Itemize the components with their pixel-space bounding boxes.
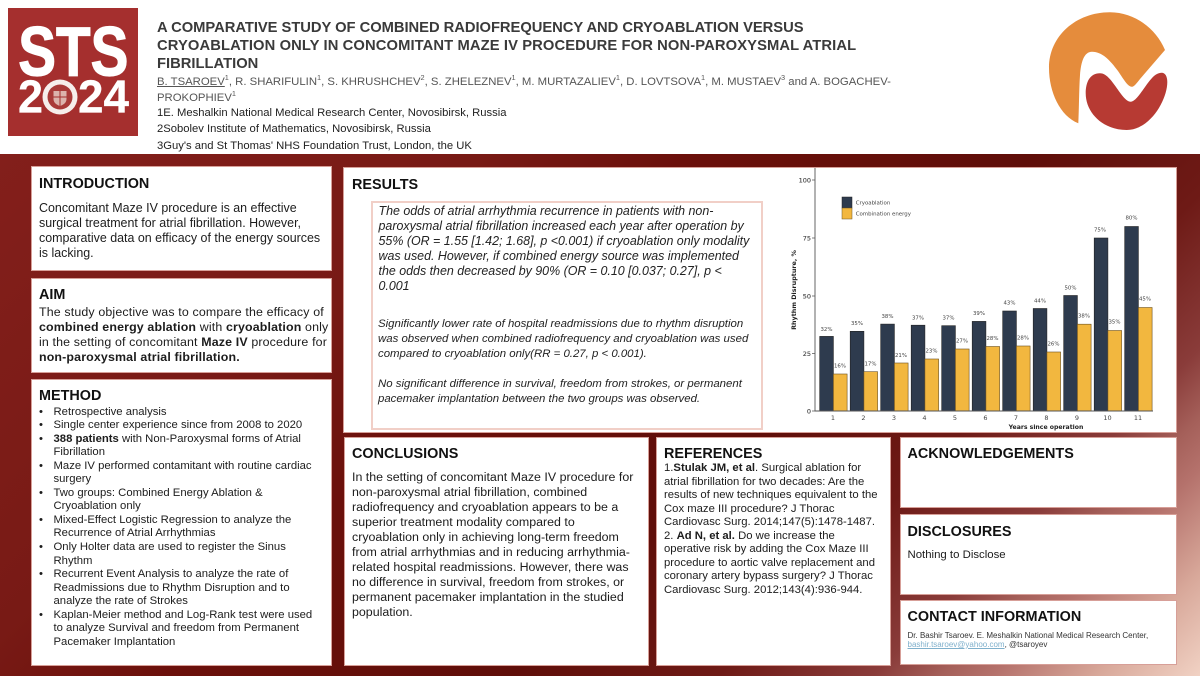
method list: Two groups: Combined Energy Ablation & [54, 487, 263, 499]
x axis tick labels: 11 [1134, 414, 1142, 422]
authors: B. TSAROEV1, R. SHARIFULIN1, S. KHRUSHCHEV2, S. ZHELEZNEV1, M. MURTAZALIEV1, D. LOVTSOVA1, M. MUSTAEV3 and A. BOGACHEV- [157, 73, 891, 88]
axes [815, 168, 1153, 411]
key finding text: paroxysmal atrial fibrillation increased each year after operation by [378, 218, 744, 232]
STS 2024 logo: 24 [78, 71, 129, 123]
introduction text: surgical treatment for atrial fibrillation. However, [39, 216, 301, 230]
y axis tick labels: 75 [803, 234, 811, 242]
method bullets: • [39, 487, 43, 499]
panel: contact information [900, 600, 1177, 665]
heading: introduction: INTRODUCTION [39, 176, 149, 192]
x axis tick labels [831, 414, 1142, 422]
references text: 1.Stulak JM, et al. Surgical ablation for [664, 462, 861, 474]
aim text: in the setting of concomitant Maze IV procedure for [39, 335, 327, 349]
no difference text [378, 378, 742, 405]
header band [0, 0, 1200, 154]
y axis tick labels [799, 176, 811, 416]
heading: method: METHOD [39, 388, 101, 404]
method list: Recurrence of Atrial Arrhythmias [54, 527, 215, 539]
bar value labels: 75% [1094, 228, 1106, 234]
x axis tick labels: 4 [922, 414, 927, 422]
conclusions text: radiofrequency and cryoablation appears to be a [352, 500, 618, 514]
references text: results of new techniques equivalent to the [664, 489, 878, 501]
method list: Recurrent Event Analysis to analyze the rate of [54, 568, 288, 580]
aim text: combined energy ablation with cryoablation only [39, 320, 328, 334]
heading: results: RESULTS [352, 177, 418, 193]
introduction text: Concomitant Maze IV procedure is an effective [39, 201, 297, 215]
references text: Cardiovasc Surg. 2014;147(5):1478-1487. [664, 516, 875, 528]
panel: conclusions [344, 437, 649, 666]
references text: Cox maze III procedure? J Thorac [664, 502, 835, 514]
x axis tick labels: 2 [861, 414, 866, 422]
conclusions text: population. [352, 605, 413, 619]
method list: Rhythm [54, 555, 92, 567]
title [157, 20, 856, 72]
conclusions text: related hospital readmissions. However, there was [352, 560, 629, 574]
key finding text [378, 204, 750, 292]
y axis title: Rhythm Disrupture, % [790, 249, 798, 330]
bar value labels: 37% [943, 316, 954, 322]
references text: operative risk by adding the Cox Maze III [664, 543, 869, 555]
x axis tick labels: 9 [1075, 414, 1079, 422]
panel: results [343, 167, 1177, 433]
title: CRYOABLATION ONLY IN CONCOMITANT MAZE IV PROCEDURE FOR NON-PAROXYSMAL ATRIAL [157, 38, 856, 54]
panel: disclosures [900, 514, 1177, 595]
method list: Only Holter data are used to register the Sinus [54, 541, 286, 553]
method bullets: • [39, 433, 43, 445]
panel: method [31, 379, 332, 666]
bar value labels: 45% [1139, 296, 1151, 302]
conclusions text: no difference in survival, freedom from strokes, or [352, 575, 624, 589]
introduction text: is lacking. [39, 246, 94, 260]
method list: Retrospective analysis [54, 406, 167, 418]
bar value labels: 26% [1048, 342, 1059, 348]
readmissions text: Significantly lower rate of hospital readmissions due to rhythm disruption [378, 318, 743, 330]
panel: acknowledgements [900, 437, 1177, 508]
method list: Mixed-Effect Logistic Regression to analyze the [54, 514, 291, 526]
x axis tick labels: 6 [983, 414, 988, 422]
conclusions text: cryoablation only in achieving long-term freedom [352, 530, 619, 544]
method list: Maze IV performed contamitant with routine cardiac [54, 460, 312, 472]
method bullets: • [39, 460, 43, 472]
bar value labels: 35% [851, 321, 863, 327]
heading: disclosures: DISCLOSURES [908, 524, 1011, 540]
aim text: non-paroxysmal atrial fibrillation. [39, 350, 240, 364]
y axis tick labels: 100 [799, 176, 811, 184]
method bullets: • [39, 514, 43, 526]
conclusions text: superior treatment modality compared to [352, 515, 575, 529]
y axis tick labels: 50 [803, 292, 811, 300]
aim text [39, 305, 328, 364]
y axis tick labels: 0 [807, 408, 811, 416]
heading: aim: AIM [39, 287, 65, 303]
STS 2024 logo [8, 8, 138, 136]
bar value labels [821, 216, 1151, 370]
legend [842, 197, 912, 219]
bar value labels: 16% [834, 364, 846, 370]
x axis tick labels: 8 [1044, 414, 1049, 422]
bar value labels: 32% [821, 327, 832, 333]
affiliations [157, 107, 507, 152]
x axis title: Years since operation [1008, 424, 1083, 431]
aim text: The study objective was to compare the efficacy of [39, 305, 324, 319]
legend: Combination energy [856, 212, 912, 218]
conclusions text: from atrial arrhythmias and in reducing arrhythmia- [352, 545, 630, 559]
bar value labels: 50% [1065, 286, 1076, 292]
y axis tick labels: 25 [803, 350, 811, 358]
references text: Cardiovasc Surg. 2012;143(4):936-944. [664, 584, 862, 596]
method bullets: • [39, 568, 43, 580]
contact details: Dr. Bashir Tsaroev. E. Meshalkin National Medical Research Center, [908, 630, 1148, 640]
method list: Single center experience since from 2008 to 2020 [54, 419, 302, 431]
method bullets: • [39, 609, 43, 621]
x axis tick labels: 5 [953, 414, 957, 422]
legend: Cryoablation [856, 200, 890, 206]
STS 2024 logo: 2 [18, 71, 43, 123]
panel: introduction [31, 166, 332, 271]
references text [664, 462, 878, 596]
bar value labels: 43% [1004, 300, 1015, 306]
heading: acknowledgements: ACKNOWLEDGEMENTS [908, 446, 1074, 462]
bar value labels: 39% [973, 311, 985, 317]
method bullets: • [39, 541, 43, 553]
contact details [908, 630, 1148, 649]
bar chart: rhythm disruption by year [790, 168, 1153, 431]
method list: Cryoablation only [54, 500, 141, 512]
heading: contact information: CONTACT INFORMATION [908, 609, 1081, 625]
method list: analyze the rate of Strokes [54, 595, 188, 607]
heading: references: REFERENCES [664, 446, 762, 462]
key finding text: was used. However, if combined energy source was implemented [378, 248, 739, 262]
readmissions text: compared to cryoablation only(RR = 0.27, p < 0.001). [378, 348, 647, 360]
bar value labels: 17% [865, 362, 876, 368]
method bullets: • [39, 406, 43, 418]
bar value labels: 21% [895, 353, 907, 359]
method list: Kaplan-Meier method and Log-Rank test were used [54, 609, 312, 621]
bar value labels: 37% [912, 316, 924, 322]
disclosures text: Nothing to Disclose [908, 549, 1006, 561]
no difference text: No significant difference in survival, freedom from strokes, or permanent [378, 378, 742, 390]
method list: surgery [54, 473, 91, 485]
method bullets [39, 406, 43, 621]
conclusions text: In the setting of concomitant Maze IV procedure for [352, 470, 633, 484]
panel: references [656, 437, 891, 666]
affiliations: 3Guy's and St Thomas' NHS Foundation Trust, London, the UK [157, 140, 472, 152]
title: A COMPARATIVE STUDY OF COMBINED RADIOFREQUENCY AND CRYOABLATION VERSUS [157, 20, 804, 36]
results callout box [371, 201, 763, 430]
introduction text: comparative data on efficacy of the energy sources [39, 231, 320, 245]
heading: conclusions: CONCLUSIONS [352, 446, 458, 462]
x axis tick labels: 7 [1014, 414, 1018, 422]
x axis tick labels: 10 [1103, 414, 1112, 422]
x axis tick labels: 3 [892, 414, 896, 422]
key finding text: 55% (OR = 1.55 [1.42; 1.68], p <0.001) if cryoablation only modality [378, 234, 749, 248]
no difference text: pacemaker implantation between the two groups was observed. [378, 393, 700, 405]
method list: Pacemaker Implantation [54, 636, 175, 648]
bar value labels: 80% [1126, 216, 1137, 222]
method bullets: • [39, 419, 43, 431]
references text: atrial fibrillation for two decades: Are the [664, 476, 864, 488]
contact details: bashir.tsaroev@yahoo.com, @tsaroyev [908, 640, 1047, 649]
chart bars [820, 226, 1152, 411]
key finding text: The odds of atrial arrhythmia recurrence in patients with non- [378, 204, 713, 218]
panel: aim [31, 278, 332, 373]
bar value labels: 38% [1078, 314, 1090, 320]
title: FIBRILLATION [157, 56, 258, 72]
x axis tick labels: 1 [831, 414, 835, 422]
authors [157, 73, 891, 104]
readmissions text: was observed when combined radiofrequency and cryoablation was used [378, 333, 748, 345]
references text: 2. Ad N, et al. Do we increase the [664, 530, 835, 542]
affiliations: 2Sobolev Institute of Mathematics, Novosibirsk, Russia [157, 123, 431, 135]
institution logo [1048, 12, 1168, 130]
method list: Fibrillation [54, 446, 105, 458]
key finding text: the odds then decreased by 90% (OR = 0.10 [0.037; 0.27], p < [378, 264, 722, 278]
bar value labels: 28% [987, 336, 998, 342]
maroon gradient background [0, 154, 1200, 676]
conclusions text [352, 470, 634, 619]
references text: coronary artery bypass surgery? J Thorac [664, 570, 873, 582]
introduction text [39, 201, 320, 260]
conclusions text: permanent pacemaker implantation in the studied [352, 590, 624, 604]
affiliations: 1E. Meshalkin National Medical Research Center, Novosibirsk, Russia [157, 107, 507, 119]
bar value labels: 35% [1109, 320, 1120, 326]
method list: 388 patients with Non-Paroxysmal forms of Atrial [54, 433, 301, 445]
conclusions text: non-paroxysmal atrial fibrillation, combined [352, 485, 587, 499]
bar value labels: 23% [926, 348, 937, 354]
bar value labels: 27% [956, 338, 968, 344]
key finding text: 0.001 [378, 278, 410, 292]
bar value labels: 38% [882, 314, 893, 320]
bar value labels: 44% [1034, 298, 1046, 304]
bar value labels: 28% [1017, 336, 1029, 342]
references text: procedure to aortic valve replacement and [664, 556, 875, 568]
method list [54, 406, 312, 648]
authors: PROKOPHIEV1 [157, 89, 236, 104]
readmissions text [378, 318, 749, 360]
method list: to analyze Survival and freedom from Permanent [54, 622, 299, 634]
method list: Readmissions due to Rhythm Disruption and to [54, 582, 290, 594]
